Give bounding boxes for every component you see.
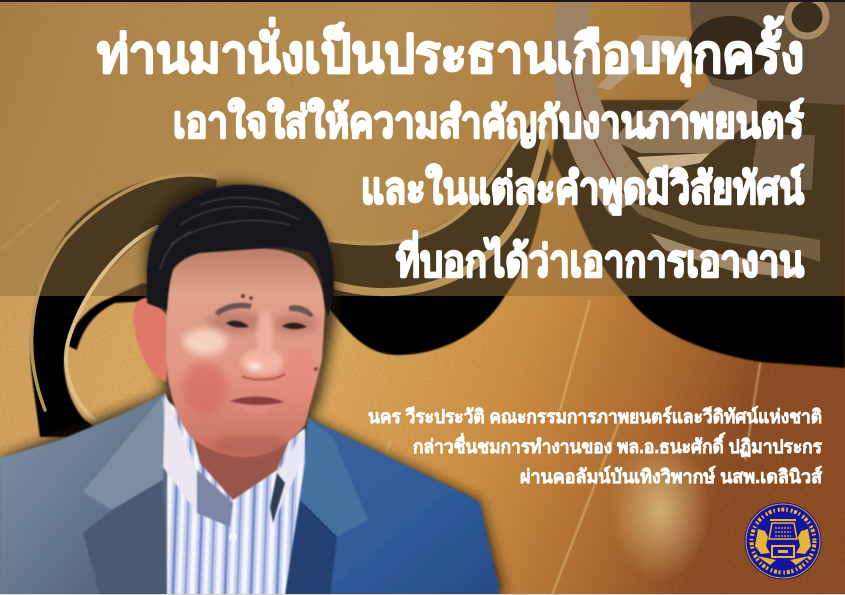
- ear: [133, 298, 172, 382]
- nose: [241, 311, 283, 375]
- film reel: [0, 0, 845, 278]
- jacket: [0, 393, 500, 595]
- attribution text: ผ่านคอลัมน์บันเทิงวิพากษ์ นสพ.เดลินิวส์: [520, 466, 822, 488]
- portrait shadow: [0, 183, 505, 595]
- emblem seal: [744, 502, 822, 580]
- mouth: [230, 397, 284, 413]
- shirt: [163, 393, 305, 595]
- neck: [190, 425, 290, 500]
- face highlights and cheeks: [183, 311, 319, 455]
- hair sheen: [160, 198, 300, 270]
- brown translucent band behind the headline: [0, 0, 845, 296]
- attribution text: [368, 406, 823, 488]
- face: [166, 247, 325, 457]
- bottom edge line: [0, 594, 845, 595]
- film ribbons: golden edges: [32, 120, 546, 420]
- headline text: [97, 16, 805, 286]
- portrait: man in suit: [0, 183, 505, 595]
- film ribbons: dark swirl: [30, 100, 845, 437]
- eyebrows and eyes: [215, 294, 318, 380]
- headline text: ท่านมานั่งเป็นประธานเกือบทุกครั้ง: [97, 16, 804, 87]
- hair: [147, 185, 334, 317]
